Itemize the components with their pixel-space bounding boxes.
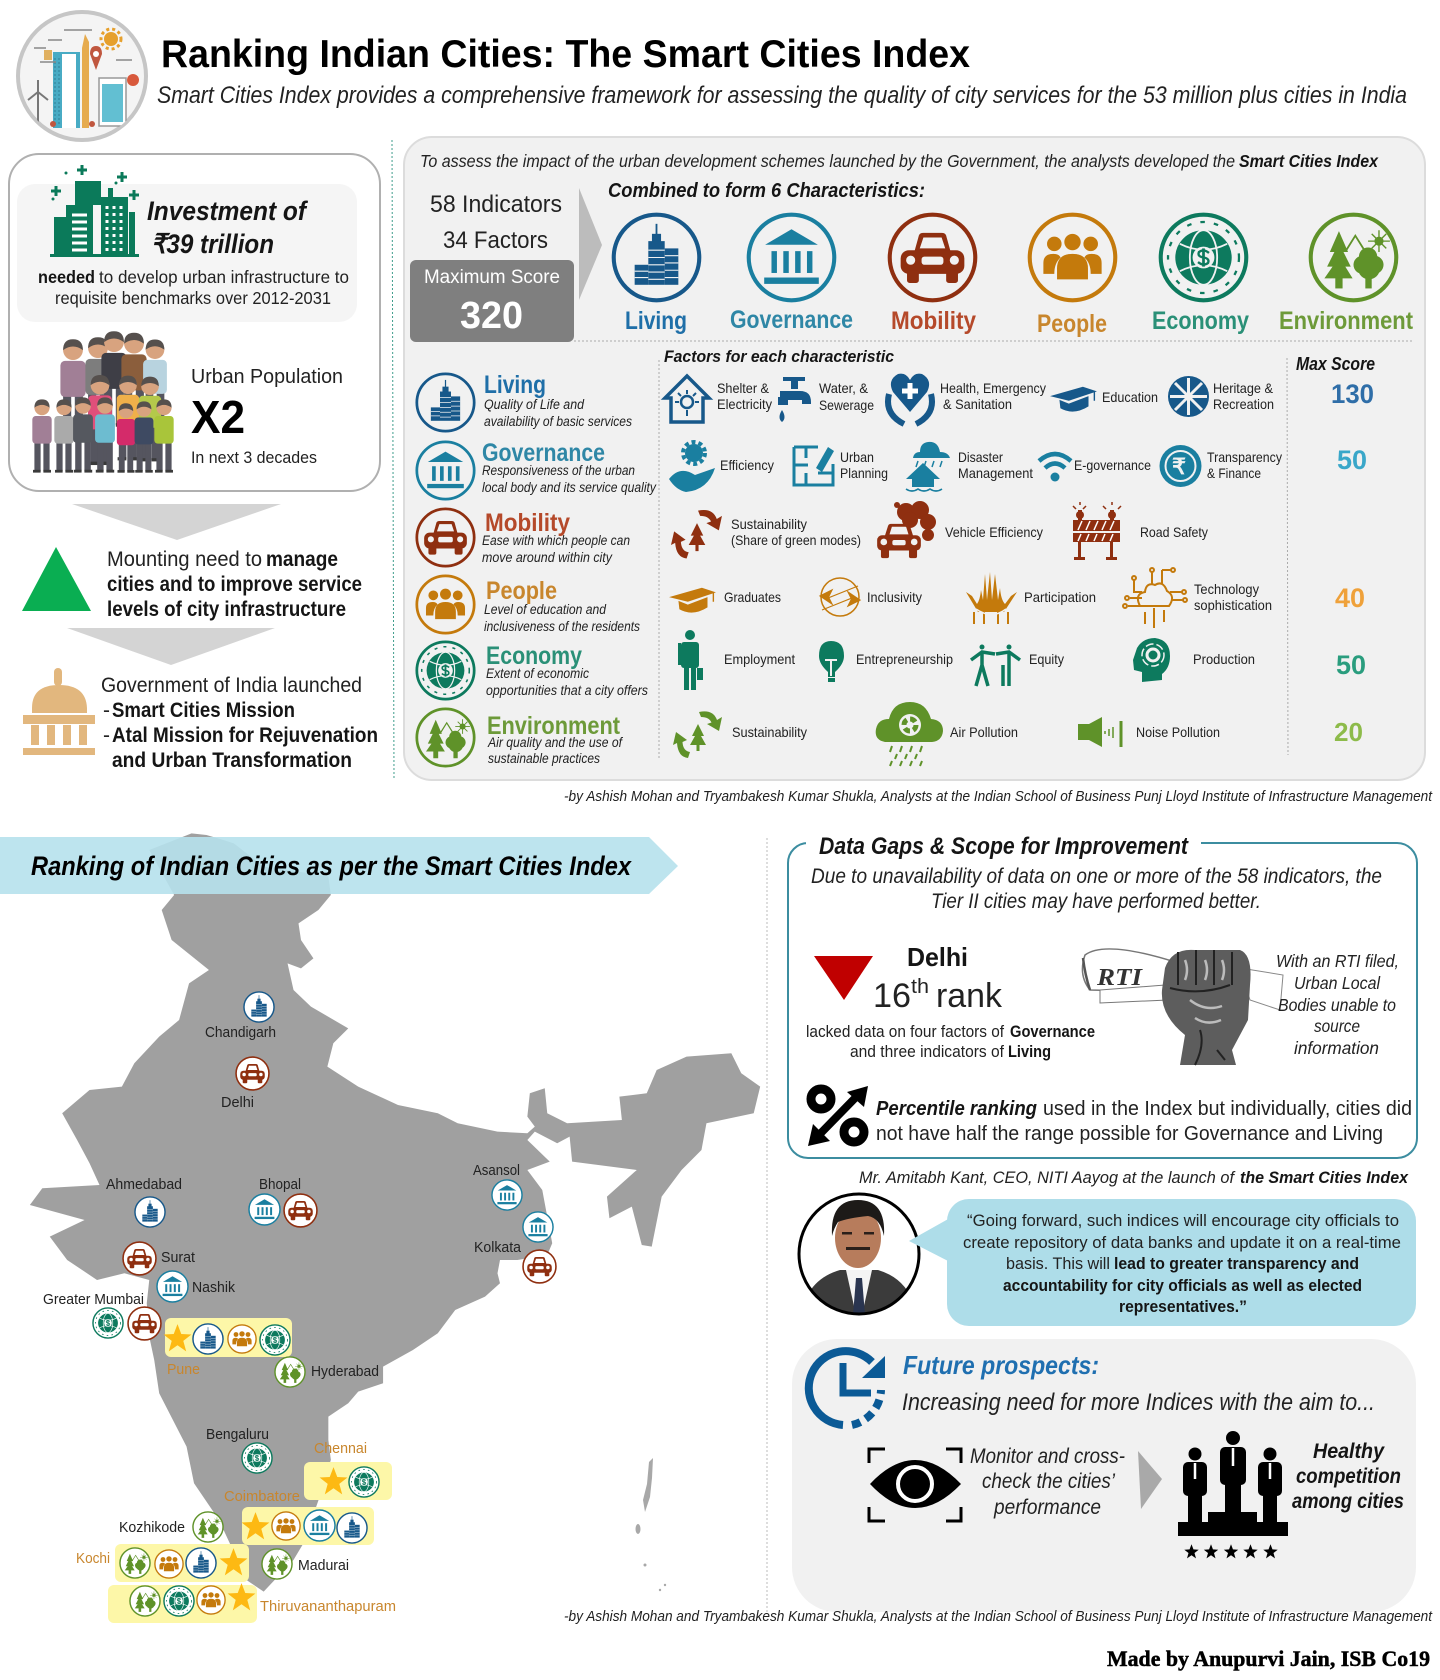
text: Delhi data gaps: and three indicators of: [850, 1043, 1004, 1061]
characteristic: governance: [730, 215, 853, 334]
factor: health, emergency and sanitation: Health, Emergency: [940, 380, 1046, 396]
characteristic: environment: [1279, 215, 1414, 335]
maximum score box: 320: [460, 295, 523, 337]
icon: smart city logo: [18, 12, 146, 140]
callout: quote: accountability for city officials as well as elected: [1003, 1277, 1362, 1295]
banner: ranking heading: [0, 837, 678, 894]
city: Chandigarh: Chandigarh: [205, 1024, 276, 1041]
factor: water and sewerage: Sewerage: [819, 397, 874, 413]
factor: road safety: Road Safety: [1140, 524, 1208, 540]
factor: education: Education: [1102, 389, 1158, 405]
city: Chennai: Chennai: [314, 1440, 367, 1457]
text: RTI note: Urban Local: [1294, 973, 1381, 993]
panel: data gaps and scope for improvement: [788, 833, 1417, 1158]
icon: podium with figures: [1178, 1431, 1288, 1536]
factor: disaster management: [906, 442, 1033, 491]
city: Delhi: [221, 1057, 269, 1111]
row label: environment: Air quality and the use of: [487, 735, 623, 750]
factor: health, emergency and sanitation: & Sanitation: [943, 396, 1012, 412]
row label: environment: [417, 709, 623, 766]
factor: equity: Equity: [1029, 651, 1064, 667]
factor: noise pollution: Noise Pollution: [1136, 724, 1220, 740]
factor: equity: [971, 644, 1064, 686]
maximum score box: Maximum Score: [424, 267, 560, 288]
text: Delhi rank: th: [911, 976, 929, 998]
row label: economy: [417, 642, 648, 699]
factor: heritage and recreation: Heritage &: [1213, 380, 1274, 396]
city: Madurai: Madurai: [298, 1557, 349, 1574]
factor: road safety: [1073, 502, 1208, 560]
text: tier II explanation: [811, 865, 1382, 913]
text: tier II explanation: Tier II cities may have performed better.: [931, 890, 1261, 913]
urban population text: X2: [191, 391, 245, 443]
factor: vehicle efficiency: Vehicle Efficiency: [945, 524, 1043, 540]
factor: technology sophistication: Technology: [1194, 581, 1259, 597]
icon: green city skyline: [50, 165, 139, 257]
row label: people: Level of education and: [484, 602, 606, 617]
row label: living: [417, 371, 632, 431]
city: Coimbatore: Coimbatore: [224, 1488, 300, 1505]
text: need for indices: Increasing need for more Indices with the aim to...: [902, 1389, 1375, 1416]
text: government schemes: -: [103, 724, 110, 747]
factor: shelter and electricity: [665, 376, 772, 422]
text: monitor: [970, 1445, 1125, 1519]
portrait: Amitabh Kant: [799, 1194, 919, 1320]
row label: environment: sustainable practices: [488, 751, 600, 766]
city: Pune: [164, 1318, 292, 1378]
city: Coimbatore: [224, 1488, 374, 1545]
text: mounting need: cities and to improve service: [107, 573, 362, 596]
text: RTI note: source: [1314, 1016, 1360, 1036]
title: Ranking Indian Cities: The Smart Cities Index: [161, 33, 970, 76]
factor: participation: Participation: [1024, 589, 1096, 605]
row label: mobility: move around within city: [482, 550, 613, 565]
factor: heritage and recreation: [1168, 376, 1274, 417]
city: Bengaluru: Bengaluru: [206, 1426, 269, 1443]
factor: urban planning: Urban: [840, 449, 874, 465]
text: mounting need: levels of city infrastructure: [107, 598, 346, 621]
text: indicators and factors: 34 Factors: [443, 227, 548, 254]
factor: heritage and recreation: Recreation: [1213, 396, 1274, 412]
factor: transparency and finance: Transparency: [1207, 449, 1282, 465]
city: Kolkata: Kolkata: [474, 1239, 522, 1256]
arrow: to characteristics: [579, 188, 602, 300]
row label: living: Quality of Life and: [484, 397, 584, 412]
factor: water and sewerage: [778, 377, 874, 422]
factor: graduates: Graduates: [724, 589, 781, 605]
factor: inclusivity: [820, 578, 922, 616]
text: Delhi rank: 16: [873, 977, 911, 1015]
factor: health, emergency and sanitation: [888, 374, 1046, 424]
text: Delhi rank: rank: [936, 977, 1003, 1015]
banner: ranking heading: Ranking of Indian Cities as per the Smart Cities Index: [31, 851, 632, 881]
investment amount: [147, 196, 309, 259]
text: government schemes: Smart Cities Mission: [112, 699, 295, 722]
text: percentile ranking: used in the Index but individually, cities did: [1043, 1097, 1412, 1120]
factor: employment: Employment: [724, 651, 795, 667]
heading: max score: Max Score: [1296, 354, 1375, 374]
investment amount: ₹39 trillion: [151, 229, 274, 259]
city: Madurai: [262, 1549, 349, 1579]
attribution: Amitabh Kant: the Smart Cities Index: [1240, 1168, 1409, 1187]
row label: people: inclusiveness of the residents: [484, 619, 640, 634]
factor: vehicle efficiency: [877, 501, 1043, 558]
heading: six characteristics: Combined to form 6 Characteristics:: [608, 180, 925, 202]
row label: environment: Environment: [487, 712, 621, 740]
row label: governance: local body and its service quality: [482, 480, 657, 495]
factor: technology sophistication: [1123, 568, 1272, 628]
row label: people: [417, 576, 640, 634]
characteristic: living: [614, 215, 699, 335]
row label: economy: Economy: [486, 642, 582, 670]
investment explanation: to develop urban infrastructure to: [99, 267, 349, 287]
characteristic: governance: Governance: [730, 306, 853, 334]
text: assessment intro: To assess the impact of the urban development schemes launched by the Government, the analysts developed the: [420, 151, 1235, 171]
maximum score box: [410, 260, 574, 342]
text: Delhi data gaps: Living: [1008, 1043, 1051, 1061]
factor: inclusivity: Inclusivity: [867, 589, 922, 605]
text: RTI note: [1276, 951, 1399, 1058]
callout: quote: representatives.”: [1119, 1298, 1247, 1316]
factor: urban planning: Planning: [840, 465, 888, 481]
icon: RTI fist: RTI: [1096, 965, 1144, 991]
factor: air pollution: Air Pollution: [950, 724, 1018, 740]
callout: quote: [909, 1199, 1416, 1326]
text: percentile ranking: not have half the range possible for Governance and Living: [876, 1122, 1383, 1145]
max score: environment: 20: [1334, 717, 1363, 747]
city: Greater Mumbai: [43, 1291, 161, 1340]
panel: future prospects: [792, 1339, 1416, 1612]
factor: production: [1133, 638, 1255, 682]
icon: eye in frame: [869, 1449, 961, 1521]
max score: living: 130: [1331, 379, 1374, 409]
row label: mobility: [417, 509, 630, 566]
text: government schemes: Government of India launched: [101, 674, 362, 697]
row label: living: availability of basic services: [484, 414, 632, 429]
city: Ahmedabad: Ahmedabad: [106, 1176, 182, 1193]
factor: sustainability, green modes: (Share of green modes): [731, 532, 861, 548]
investment explanation: requisite benchmarks over 2012-2031: [55, 288, 331, 308]
city: Pune: Pune: [167, 1361, 200, 1378]
factor: disaster management: Disaster: [958, 449, 1003, 465]
text: government schemes: and Urban Transformation: [112, 749, 352, 772]
heading: data gaps: Data Gaps & Scope for Improvement: [819, 833, 1189, 860]
factor: entrepreneurship: [819, 641, 953, 682]
text: mounting need: [107, 548, 362, 621]
text: indicators and factors: 58 Indicators: [430, 191, 562, 218]
row label: living: Living: [484, 371, 546, 399]
factor: disaster management: Management: [958, 465, 1033, 481]
callout: quote: basis. This will: [1006, 1255, 1110, 1273]
factor: urban planning: [794, 447, 888, 485]
row label: governance: [417, 439, 657, 499]
panel: investment highlight: [17, 184, 357, 322]
heading: factors: Factors for each characteristic: [664, 347, 894, 366]
text: healthy competition: competition: [1296, 1465, 1401, 1488]
icon: clock with arrow: [809, 1351, 885, 1425]
text: assessment intro: Smart Cities Index: [1239, 151, 1379, 171]
factor: sustainability, green modes: [671, 510, 861, 558]
factor: transparency and finance: & Finance: [1207, 465, 1261, 481]
city: Bhopal: [249, 1176, 317, 1227]
text: indicators and factors: [430, 191, 562, 254]
factor: shelter and electricity: Shelter &: [717, 380, 770, 396]
characteristic: mobility: [890, 215, 976, 335]
city: Surat: Surat: [161, 1249, 196, 1266]
icon: crowd of people: [32, 331, 174, 473]
row label: mobility: Mobility: [485, 509, 570, 537]
city: Surat: [123, 1242, 196, 1275]
row label: governance: Responsiveness of the urban: [482, 463, 635, 478]
factor: graduates: [669, 588, 781, 613]
characteristic: living: Living: [625, 307, 687, 335]
characteristic: people: [1030, 215, 1115, 338]
attribution: Amitabh Kant: Mr. Amitabh Kant, CEO, NITI Aayog at the launch of: [859, 1168, 1236, 1187]
factor: transparency and finance: ₹: [1172, 454, 1186, 479]
city: Kozhikode: Kozhikode: [119, 1519, 185, 1536]
urban population text: In next 3 decades: [191, 448, 317, 467]
row label: mobility: Ease with which people can: [482, 533, 630, 548]
icon: RTI fist: [1082, 949, 1283, 1065]
city: Kochi: [76, 1544, 249, 1582]
urban population text: [191, 366, 343, 467]
text: mounting need: Mounting need to: [107, 548, 262, 571]
factor: transparency and finance: [1160, 445, 1282, 487]
text: healthy competition: among cities: [1292, 1490, 1404, 1513]
factor: shelter and electricity: Electricity: [717, 396, 772, 412]
investment explanation: needed: [38, 267, 95, 287]
characteristic: mobility: Mobility: [891, 307, 976, 335]
city: Greater Mumbai: Greater Mumbai: [43, 1291, 144, 1308]
city: Bengaluru: [206, 1426, 272, 1473]
city: Kozhikode: [119, 1512, 223, 1542]
icon: government building: [23, 668, 95, 755]
city: Hyderabad: Hyderabad: [311, 1363, 379, 1380]
arrow: down chevron 2: [67, 628, 275, 665]
text: RTI note: Bodies unable to: [1278, 995, 1396, 1015]
max score: economy: 50: [1336, 650, 1366, 680]
factor: technology sophistication: sophistication: [1194, 597, 1272, 613]
factor: efficiency: [669, 442, 774, 492]
arrow: to competition: [1138, 1451, 1162, 1509]
max score: governance: 50: [1337, 445, 1367, 475]
text: Delhi data gaps: lacked data on four factors of: [806, 1023, 1004, 1041]
factor: entrepreneurship: Entrepreneurship: [856, 651, 953, 667]
factor: production: Production: [1193, 651, 1255, 667]
investment amount: Investment of: [147, 196, 309, 226]
city: Hyderabad: [275, 1357, 379, 1387]
signature: Made by Anupurvi Jain, ISB Co19: [1107, 1646, 1430, 1671]
text: Delhi rank: Delhi: [907, 942, 968, 972]
city: Asansol: Asansol: [473, 1162, 520, 1179]
text: Delhi data gaps: [806, 1023, 1095, 1061]
text: government schemes: -: [103, 699, 110, 722]
text: RTI note: With an RTI filed,: [1276, 951, 1399, 971]
heading: future prospects: Future prospects:: [903, 1350, 1099, 1380]
text: healthy competition: Healthy: [1313, 1440, 1385, 1463]
factor: sustainability: Sustainability: [732, 724, 807, 740]
panel: investment and urban population: [9, 154, 380, 491]
factor: e-governance: E-governance: [1074, 457, 1151, 473]
characteristic: economy: Economy: [1152, 307, 1249, 335]
text: percentile ranking: [876, 1097, 1412, 1145]
factor: sustainability: [673, 711, 807, 758]
city: Nashik: [157, 1271, 235, 1302]
callout: quote: “Going forward, such indices will encourage city officials to: [967, 1212, 1399, 1230]
text: monitor: check the cities’: [982, 1470, 1115, 1493]
characteristic: environment: Environment: [1279, 307, 1414, 335]
factor: air pollution: [876, 702, 1018, 766]
city: Delhi: Delhi: [221, 1094, 254, 1111]
city: Kolkata: [474, 1212, 556, 1283]
callout: quote: lead to greater transparency and: [1114, 1255, 1359, 1273]
row label: people: People: [486, 577, 557, 605]
row label: governance: Governance: [482, 439, 605, 467]
icon: percent with arrows: [808, 1086, 868, 1146]
factor: e-governance: [1039, 454, 1151, 482]
city: Thiruvananthapuram: Thiruvananthapuram: [260, 1598, 396, 1615]
text: RTI note: information: [1294, 1038, 1379, 1058]
text: monitor: performance: [993, 1496, 1101, 1519]
city: Kochi: Kochi: [76, 1550, 110, 1567]
callout: quote: create repository of data banks and update it on a real-time: [963, 1234, 1401, 1252]
city: Nashik: Nashik: [192, 1279, 235, 1296]
text: monitor: Monitor and cross-: [970, 1445, 1125, 1468]
factor: education: [1050, 387, 1158, 412]
panel: smart cities index framework: [404, 137, 1425, 780]
icon: green up triangle: [22, 547, 91, 611]
characteristic: people: People: [1037, 310, 1107, 338]
factor: employment: [678, 630, 795, 690]
icon: five stars: [1184, 1544, 1278, 1558]
arrow: down chevron 1: [72, 504, 281, 540]
row label: economy: Extent of economic: [486, 666, 589, 681]
factor: water and sewerage: Water, &: [819, 380, 869, 396]
text: healthy competition: [1292, 1440, 1404, 1513]
text: Delhi rank: [873, 942, 1003, 1015]
city: Chandigarh: [205, 992, 276, 1041]
max score: people: 40: [1335, 583, 1365, 613]
text: mounting need: manage: [266, 548, 338, 571]
factor: sustainability, green modes: Sustainability: [731, 516, 807, 532]
text: government schemes: Atal Mission for Rejuvenation: [112, 724, 378, 747]
city: Thiruvananthapuram: [108, 1583, 396, 1623]
factor: participation: [966, 572, 1096, 624]
city: Ahmedabad: [106, 1176, 182, 1227]
city: Asansol: [473, 1162, 522, 1210]
row label: economy: opportunities that a city offers: [486, 683, 648, 698]
text: percentile ranking: Percentile ranking: [876, 1097, 1037, 1120]
urban population text: Urban Population: [191, 366, 343, 388]
map: India: [30, 833, 760, 1592]
factor: noise pollution: [1078, 717, 1220, 747]
text: government schemes: [101, 674, 378, 772]
text: Delhi data gaps: Governance: [1010, 1023, 1095, 1041]
factor: efficiency: Efficiency: [720, 457, 774, 473]
investment explanation: [38, 267, 349, 308]
city: Bhopal: Bhopal: [259, 1176, 301, 1193]
text: tier II explanation: Due to unavailability of data on one or more of the 58 indicators, the: [811, 865, 1382, 888]
icon: red down triangle: [814, 956, 873, 1000]
characteristic: economy: [1152, 215, 1249, 335]
city: Chennai: [304, 1440, 392, 1500]
